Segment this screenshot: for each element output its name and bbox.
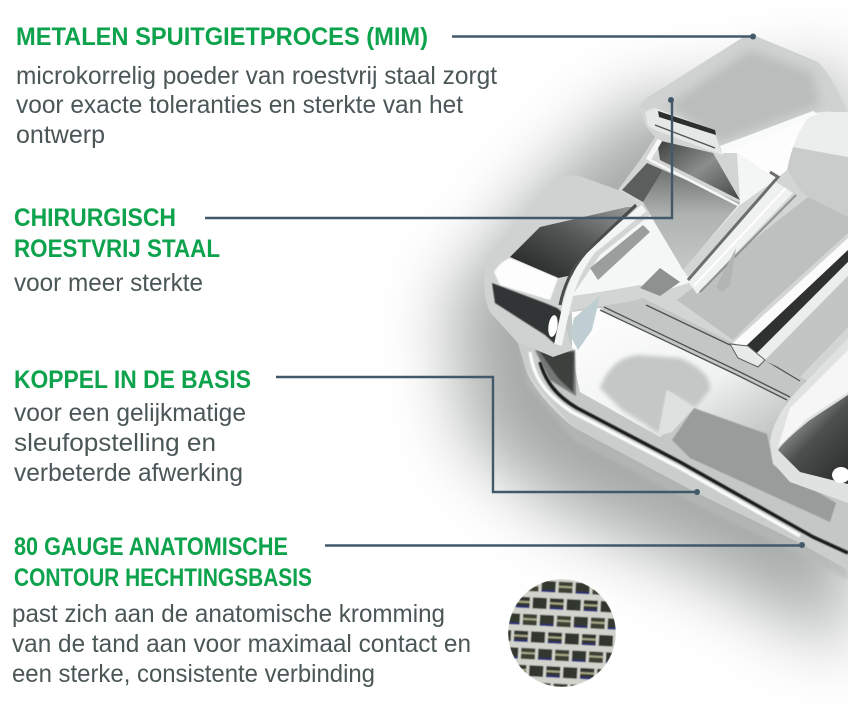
neck dark upper <box>657 140 740 200</box>
background shadow <box>450 70 848 650</box>
text block: 80 gauge hechtingsbasis: van de tand aan voor maximaal contact en <box>12 630 471 658</box>
text block: metalen spuitgietproces <box>16 23 497 149</box>
neck dark lower <box>622 163 663 202</box>
grey diagonal below lower wing <box>590 225 650 280</box>
slot panel left of wire <box>677 197 848 340</box>
text block: koppel in de basis: KOPPEL IN DE BASIS <box>14 366 251 394</box>
archwire strips <box>733 238 848 347</box>
white floor below central panel <box>572 215 692 296</box>
callout line: koppel <box>276 377 700 495</box>
white block beneath upper wing <box>721 118 808 176</box>
lower right wing <box>770 338 848 503</box>
base inner floor <box>550 302 848 540</box>
callout line: hechtingsbasis <box>325 542 805 548</box>
text block: chirurgisch roestvrij staal: CHIRURGISCH <box>14 204 176 232</box>
text block: koppel in de basis: verbeterde afwerking <box>14 459 243 487</box>
slot rail chrome <box>687 180 793 294</box>
text block: metalen spuitgietproces: ontwerp <box>16 121 105 149</box>
text block: 80 gauge hechtingsbasis: past zich aan de anatomische kromming <box>12 600 445 628</box>
lower right wing highlight <box>778 350 848 447</box>
wing shoulder white edge <box>720 111 818 154</box>
central grey panel <box>643 170 740 270</box>
upper wing face <box>757 36 846 112</box>
upper wing soft centre <box>668 50 820 142</box>
text block: 80 gauge hechtingsbasis: een sterke, consistente verbinding <box>12 660 375 688</box>
text block: koppel in de basis <box>14 366 251 487</box>
double rail lines <box>600 305 800 400</box>
lower wing dark band <box>510 207 637 278</box>
slot panel right of wire <box>763 275 848 377</box>
text block: chirurgisch roestvrij staal: ROESTVRIJ STAAL <box>14 235 220 263</box>
text block: koppel in de basis: voor een gelijkmatige <box>14 399 246 427</box>
base white edge line <box>530 352 800 536</box>
bracket illustration <box>470 20 848 580</box>
callout line: MIM <box>452 34 756 40</box>
base dark edge line <box>540 362 848 553</box>
lower wing white cap <box>494 258 558 300</box>
dark corner inside base <box>535 350 576 396</box>
white area under wing tip <box>793 111 848 157</box>
wire junction <box>730 344 765 367</box>
hook step <box>659 390 690 434</box>
text block: chirurgisch roestvrij staal: voor meer sterkte <box>14 269 203 297</box>
upper wing hook <box>645 108 722 155</box>
lower right wing dark face <box>778 395 848 484</box>
text block: 80 gauge hechtingsbasis <box>12 533 471 688</box>
upper right underside <box>787 147 848 217</box>
grey strip between the double lines <box>601 298 746 380</box>
dark floor <box>672 408 836 522</box>
bright slope <box>572 308 787 440</box>
lower wing dark bottom <box>492 283 564 345</box>
silhouette base <box>487 36 842 567</box>
text block: chirurgisch roestvrij staal <box>14 204 220 297</box>
text block: 80 gauge hechtingsbasis: 80 GAUGE ANATOMISCHE <box>14 533 288 561</box>
callout line: chirurgisch staal <box>205 97 674 218</box>
bluish reflection <box>570 296 600 350</box>
base rim <box>510 340 848 570</box>
lower left wing face <box>508 210 650 357</box>
lower wing chrome curve <box>558 208 644 345</box>
text block: metalen spuitgietproces: microkorrelig poeder van roestvrij staal zorgt <box>16 62 497 90</box>
text block: metalen spuitgietproces: voor exacte toleranties en sterkte van het <box>16 91 463 119</box>
small grey block beside rail <box>716 248 736 292</box>
grey hook blob <box>600 355 710 434</box>
central chrome wedge <box>706 153 776 243</box>
text block: koppel in de basis: sleufopstelling en <box>14 429 216 457</box>
icon: mesh base swatch <box>508 579 616 687</box>
text block: metalen spuitgietproces: METALEN SPUITGIETPROCES (MIM) <box>16 23 428 51</box>
text block: 80 gauge hechtingsbasis: CONTOUR HECHTINGSBASIS <box>14 564 312 592</box>
